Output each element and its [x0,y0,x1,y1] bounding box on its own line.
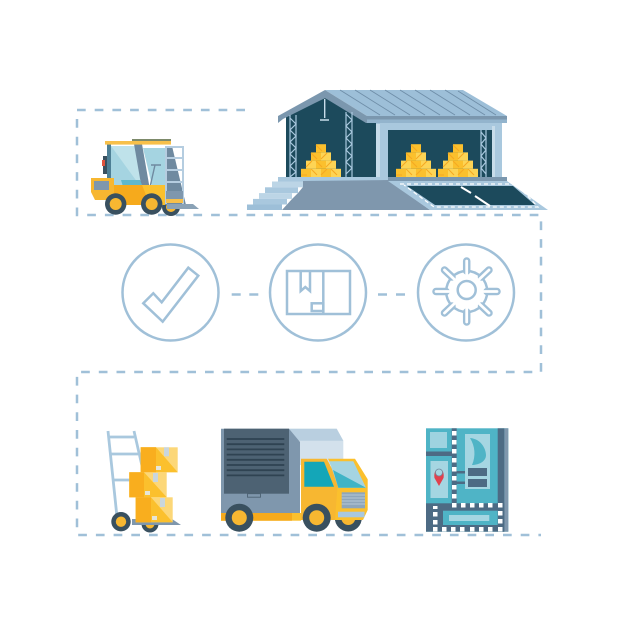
map crescent lake [470,438,486,465]
forklift front wheel [105,193,126,215]
forklift body [91,178,165,205]
warehouse left dark wall [286,98,376,177]
dashes between circles right [378,293,405,296]
warehouse columns and beam [376,120,502,178]
dashes between circles left [232,293,258,296]
forklift [91,139,199,216]
box pile right [438,144,478,177]
truck bumper [338,512,364,517]
truck cab window [304,462,334,487]
icon: gear [436,261,497,322]
warehouse [247,90,548,210]
truck cargo door [224,429,289,494]
bottom box [136,497,173,522]
warehouse roof [278,90,507,123]
map [426,428,508,532]
circle: check mark [122,244,218,340]
map blocks [430,432,498,525]
delivery truck [221,429,368,532]
map roads [426,428,504,532]
truck base strip [221,513,301,521]
dashed connector path [77,110,541,535]
truck back wheel [335,504,362,532]
icon: box [287,271,350,314]
truck cargo top panel [289,429,343,465]
forklift back wheel [162,198,180,216]
forklift middle wheel [141,193,162,215]
box pile middle [396,144,436,177]
ramp [282,180,430,210]
forklift rear panel [165,146,186,205]
loading dock [388,181,548,210]
circle: package [270,244,366,340]
map edge strip [504,428,508,532]
warehouse opening [388,130,492,177]
truck cab door [301,459,338,520]
truck door latch [248,494,260,497]
stairs [247,177,304,210]
warehouse lamp [320,99,329,120]
middle box [129,472,167,497]
forklift ladder [165,146,184,204]
box pile left [301,144,341,177]
forklift cab [102,144,165,194]
forklift fork [167,204,199,209]
warehouse floor strip [286,177,507,181]
warehouse lattice pillars [290,112,486,177]
hand truck with boxes [108,431,181,532]
forklift roof [105,139,171,145]
truck rear wheel [225,504,253,532]
truck cargo side [221,429,300,514]
hand truck rear wheel [142,516,158,532]
truck windshield [329,461,366,488]
circle: gear [418,244,514,340]
top box [141,447,178,472]
hand truck frame [108,431,142,517]
map location pin [434,469,444,486]
truck front wheel [303,504,331,532]
truck door louvres [227,439,284,475]
truck grille [342,492,365,508]
hand truck base plate [132,519,181,525]
map road markings [433,431,502,532]
map buildings [468,468,487,487]
hand truck front wheel [111,512,131,531]
truck cab front [328,459,368,520]
icon: check mark [143,268,198,322]
map ground [426,428,508,532]
